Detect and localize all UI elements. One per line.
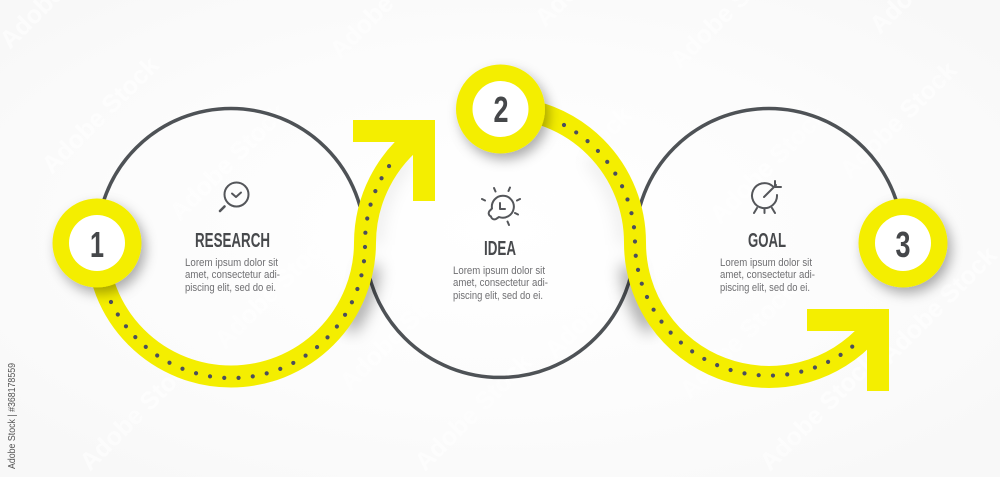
watermark pattern: Adobe Stock — [754, 348, 882, 476]
gray circle outlines — [97, 108, 903, 377]
step 2 text: piscing elit, sed do ei. — [453, 290, 543, 302]
badge 2 — [456, 64, 545, 154]
watermark pattern: Adobe Stock — [409, 348, 537, 476]
step 1 text: RESEARCH — [195, 229, 270, 252]
arrow head 1 — [353, 120, 435, 201]
icon: target with arrow — [752, 181, 781, 213]
badge 2: 2 — [494, 89, 508, 130]
icon: lightbulb with clock — [482, 188, 520, 225]
arrow head 2 — [807, 309, 889, 391]
watermark pattern: Adobe Stock — [704, 101, 832, 229]
watermark pattern: Adobe Stock — [509, 101, 637, 229]
watermark pattern: Adobe Stock — [74, 348, 202, 476]
badge 3: 3 — [896, 224, 910, 265]
watermark pattern: Adobe Stock — [539, 236, 667, 364]
badge 1 — [52, 198, 142, 288]
badge 1: 1 — [90, 224, 104, 265]
step 3 text — [720, 229, 815, 294]
step 2 text: IDEA — [484, 237, 516, 260]
watermark pattern: Adobe Stock — [334, 268, 462, 396]
step 1 text: Lorem ipsum dolor sit — [185, 257, 278, 269]
watermark pattern: Adobe Stock — [674, 276, 802, 404]
step 3 text: GOAL — [748, 229, 786, 252]
yellow path step 1 with arrow — [97, 120, 435, 376]
step 3 text: Lorem ipsum dolor sit — [720, 257, 812, 269]
step 1 text: amet, consectetur adi- — [185, 269, 280, 281]
step 1 text — [185, 229, 280, 294]
step 3 text: piscing elit, sed do ei. — [720, 282, 810, 294]
watermark pattern: Adobe Stock — [209, 226, 337, 354]
yellow path step 2 and 3 with arrow — [500, 108, 889, 391]
stock id side label: Adobe Stock | #368178559 — [6, 363, 18, 469]
watermark pattern: Adobe Stock — [36, 51, 164, 179]
band shadows — [348, 157, 652, 329]
step 2 text: amet, consectetur adi- — [453, 277, 548, 289]
watermark pattern: Adobe Stock — [874, 241, 1000, 369]
step 1 text: piscing elit, sed do ei. — [185, 282, 276, 294]
step 3 text: amet, consectetur adi- — [720, 269, 815, 281]
badge 3 — [858, 198, 948, 288]
watermark pattern: Adobe Stock — [164, 98, 292, 226]
dotted lines on the yellow path — [111, 125, 853, 378]
step 2 text — [453, 237, 548, 302]
icon: magnifier with check — [220, 182, 248, 211]
watermark pattern: Adobe Stock — [834, 56, 962, 184]
step 2 text: Lorem ipsum dolor sit — [453, 265, 545, 277]
